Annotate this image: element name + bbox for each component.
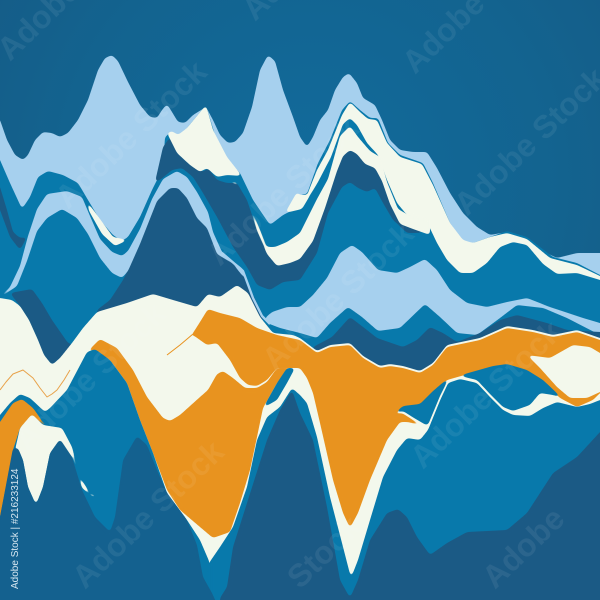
layer: lower navy ridge [313, 315, 600, 375]
watermarks: Adobe Stock [403, 313, 569, 475]
layer: medium sliver by orange [263, 368, 295, 408]
layer: central navy band [155, 137, 428, 290]
layer: upper-left navy sliver [0, 150, 27, 250]
layer: white blob inside orange [527, 345, 600, 398]
layer: orange upper band and tip [167, 309, 600, 528]
layer: left navy strip [10, 289, 74, 365]
layer: lower light blue ridge [265, 245, 600, 344]
vertical credit text: Adobe Stock | #216233124 [10, 468, 21, 589]
line: light band tail [222, 253, 270, 324]
line: orange tail [167, 334, 193, 355]
layer: upper white band [285, 102, 600, 287]
layer: white peak [167, 105, 242, 177]
watermarks: Adobe [475, 500, 571, 595]
layer: lower-right dark mass [220, 390, 600, 600]
watermarks: Adobe Stock [200, 110, 366, 272]
layer: upper light blue ridge [0, 55, 600, 300]
layer: thin light blue band [0, 171, 267, 322]
layer: big white stratum [0, 285, 600, 600]
line: white arc [428, 378, 515, 428]
watermarks: Adobe Stock [7, 295, 173, 457]
layer: medium blue base [0, 101, 600, 420]
layer: lower-left dark mass [0, 436, 222, 600]
layer: orange main body [87, 339, 294, 538]
layer: left orange fragment [0, 399, 52, 560]
layer: large navy peak [97, 187, 263, 335]
layer: left white blob [15, 414, 100, 505]
layer: lower white strip [218, 126, 430, 266]
watermarks: Adobe Stock [48, 53, 214, 215]
layer: white sliver [86, 200, 128, 246]
layer: right medium blue mass [209, 379, 600, 600]
layer: medium pocket under orange [393, 364, 577, 425]
watermarks: Stock [280, 508, 368, 595]
line: thin orange thread [0, 370, 70, 397]
watermarks: Adobe Stock [255, 215, 421, 377]
watermarks: Adobe Stock [65, 433, 231, 595]
layer: left medium blue mass [0, 349, 222, 600]
